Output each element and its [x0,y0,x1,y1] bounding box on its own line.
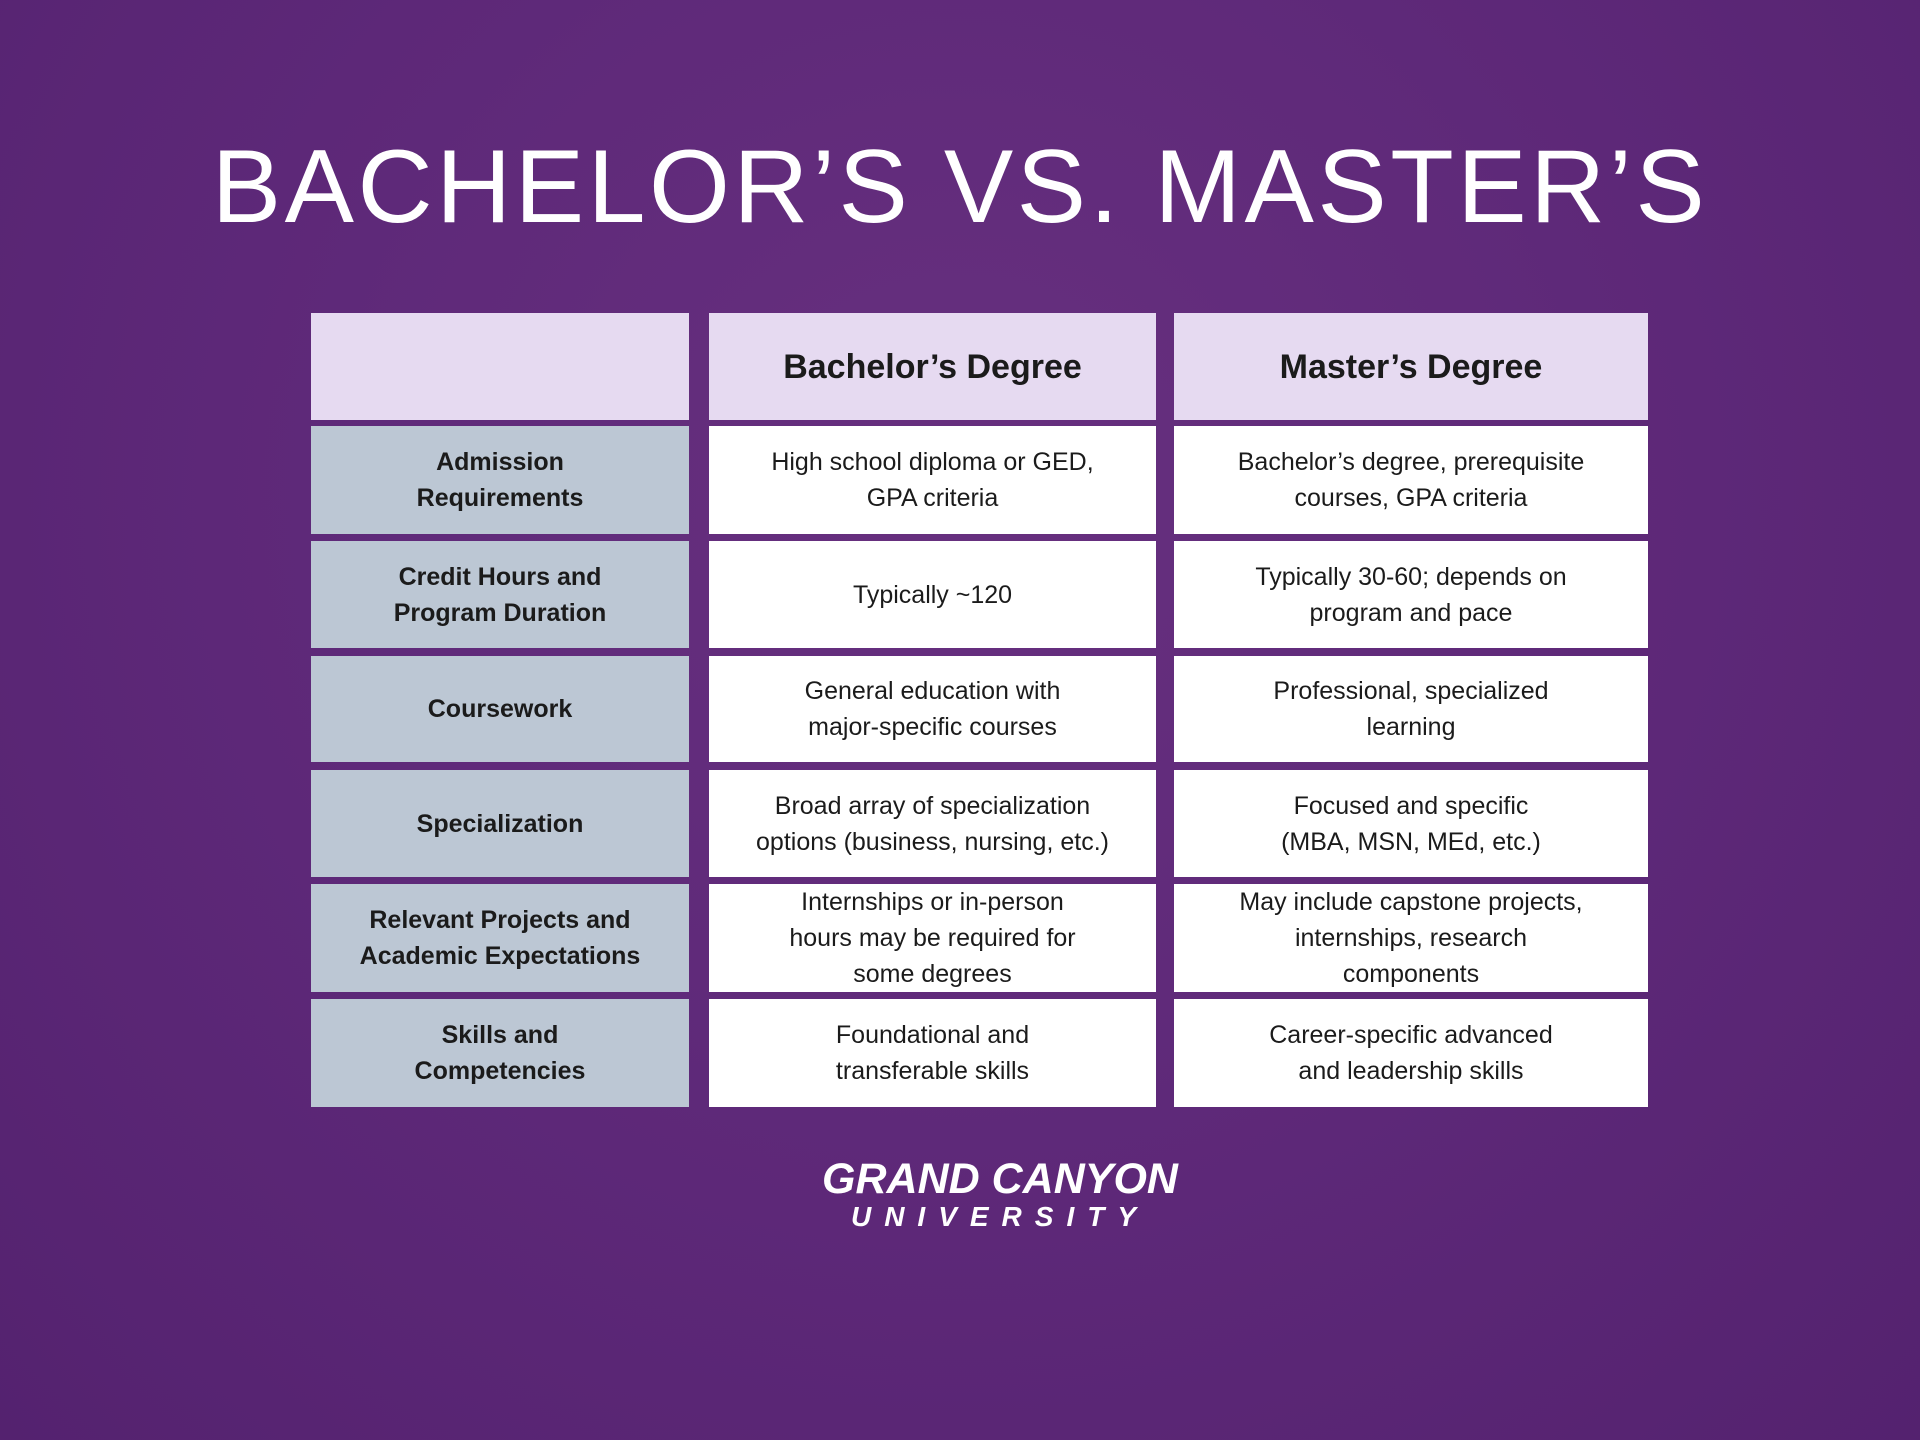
cell: Bachelor’s degree, prerequisite [1238,448,1584,476]
header: bachelor's: Bachelor’s Degree [783,348,1082,386]
row: admission: Admission [436,448,564,476]
cell: Foundational and [836,1021,1029,1049]
cell: and leadership skills [1298,1057,1524,1085]
cell: courses, GPA criteria [1295,484,1527,512]
cell [1174,541,1648,648]
cell: Professional, specialized [1273,677,1549,705]
row: admission [311,426,689,534]
cell [709,999,1156,1107]
cell: options (business, nursing, etc.) [756,828,1109,856]
row: projects [311,884,689,992]
cell: learning [1367,713,1455,741]
cell [709,541,1156,648]
row: projects: Academic Expectations [360,942,640,970]
row: credit hours [311,541,689,648]
cell: GPA criteria [867,484,998,512]
cell [1174,426,1648,534]
cell [709,884,1156,992]
cell: internships, research [1295,924,1527,952]
header: empty [311,313,689,420]
logo: GRAND CANYON [822,1155,1178,1203]
cell: High school diploma or GED, [771,448,1094,476]
cell [1174,770,1648,877]
cell [1174,884,1648,992]
cell [1174,656,1648,762]
cell: Typically ~120 [853,580,1012,608]
row: coursework: Coursework [428,695,572,723]
cell: General education with [805,677,1060,705]
cell: Career-specific advanced [1269,1021,1553,1049]
cell [709,656,1156,762]
cell: some degrees [853,960,1012,988]
cell: major-specific courses [808,713,1057,741]
row: coursework [311,656,689,762]
cell: May include capstone projects, [1239,888,1583,916]
row: skills: Competencies [415,1057,585,1085]
header: master's: Master’s Degree [1280,348,1542,386]
title: BACHELOR’S VS. MASTER’S [212,129,1708,245]
row: skills: Skills and [442,1021,558,1049]
cell [709,426,1156,534]
table [311,313,1648,1107]
cell: Internships or in-person [801,888,1064,916]
row: specialization: Specialization [417,810,583,838]
cell: Typically 30-60; depends on [1255,562,1567,590]
cell: Broad array of specialization [775,792,1090,820]
cell: transferable skills [836,1057,1029,1085]
row: admission: Requirements [417,484,583,512]
header: bachelor's [709,313,1156,420]
cell [709,770,1156,877]
cell [1174,999,1648,1107]
row: skills [311,999,689,1107]
logo [822,1155,1179,1232]
row: credit hours: Credit Hours and [399,562,601,590]
row: projects: Relevant Projects and [369,906,631,934]
header: master's [1174,313,1648,420]
cell: components [1343,960,1479,988]
logo: UNIVERSITY [851,1201,1149,1232]
cell: hours may be required for [789,924,1076,952]
cell: program and pace [1310,598,1512,626]
row: credit hours: Program Duration [394,598,606,626]
cell: Focused and specific [1294,792,1528,820]
cell: (MBA, MSN, MEd, etc.) [1281,828,1541,856]
row: specialization [311,770,689,877]
